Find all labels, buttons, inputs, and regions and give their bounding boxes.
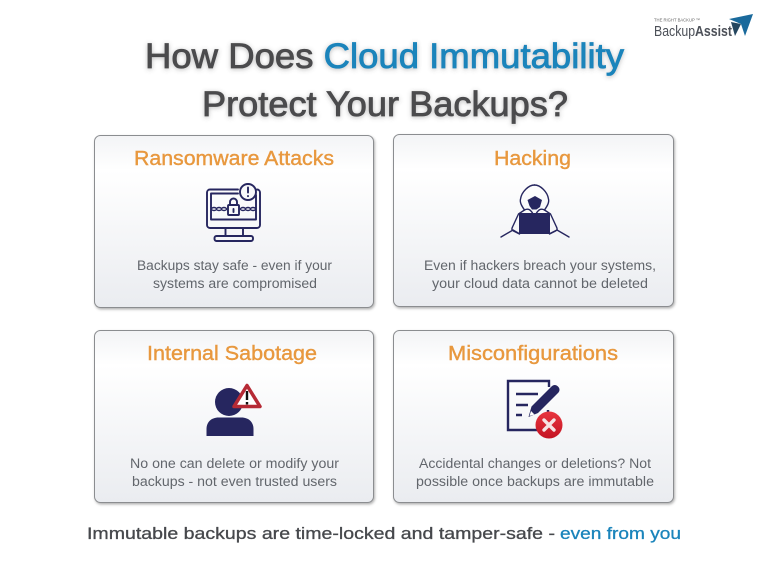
panel: misconfigurations: possible once backups are immutable	[416, 474, 654, 489]
panel: internal sabotage	[94, 330, 374, 502]
text: misconfigurations description: Accidental changes or deletions? Not	[419, 456, 651, 471]
title: How Does Cloud Immutability	[145, 37, 625, 76]
panel: ransomware attacks	[94, 136, 374, 308]
title: Protect Your Backups?	[202, 85, 568, 124]
logo: BackupAssist	[654, 14, 753, 40]
footer statement: Immutable backups are time-locked and tamper-safe -	[87, 524, 555, 543]
logo: BackupAssist: THE RIGHT BACKUP ™	[654, 18, 700, 22]
footer statement: even from you	[560, 524, 681, 543]
panel: internal sabotage: backups - not even trusted users	[132, 474, 337, 489]
text: sabotage description: No one can delete or modify your	[130, 456, 340, 471]
icon: hooded hacker at laptop	[501, 185, 569, 237]
icon: document, pencil and red cross	[508, 381, 562, 438]
heading: ransomware attacks: Ransomware Attacks	[134, 147, 334, 170]
logo: BackupAssist: BackupAssist	[654, 24, 732, 40]
footer statement	[87, 524, 681, 543]
text: ransomware description: Backups stay safe - even if your	[137, 258, 333, 273]
panel: ransomware attacks: systems are compromised	[153, 276, 317, 291]
panel: misconfigurations	[394, 330, 674, 502]
heading: internal sabotage: Internal Sabotage	[147, 342, 317, 365]
icon: locked monitor with alert	[207, 184, 260, 241]
panel: hacking: your cloud data cannot be deleted	[432, 276, 648, 291]
heading: misconfigurations: Misconfigurations	[448, 342, 618, 365]
icon: person with warning triangle	[206, 386, 260, 436]
heading: hacking: Hacking	[494, 147, 571, 170]
title	[145, 37, 625, 124]
panel: hacking	[394, 134, 674, 306]
text: hacking description: Even if hackers breach your systems,	[424, 258, 656, 273]
